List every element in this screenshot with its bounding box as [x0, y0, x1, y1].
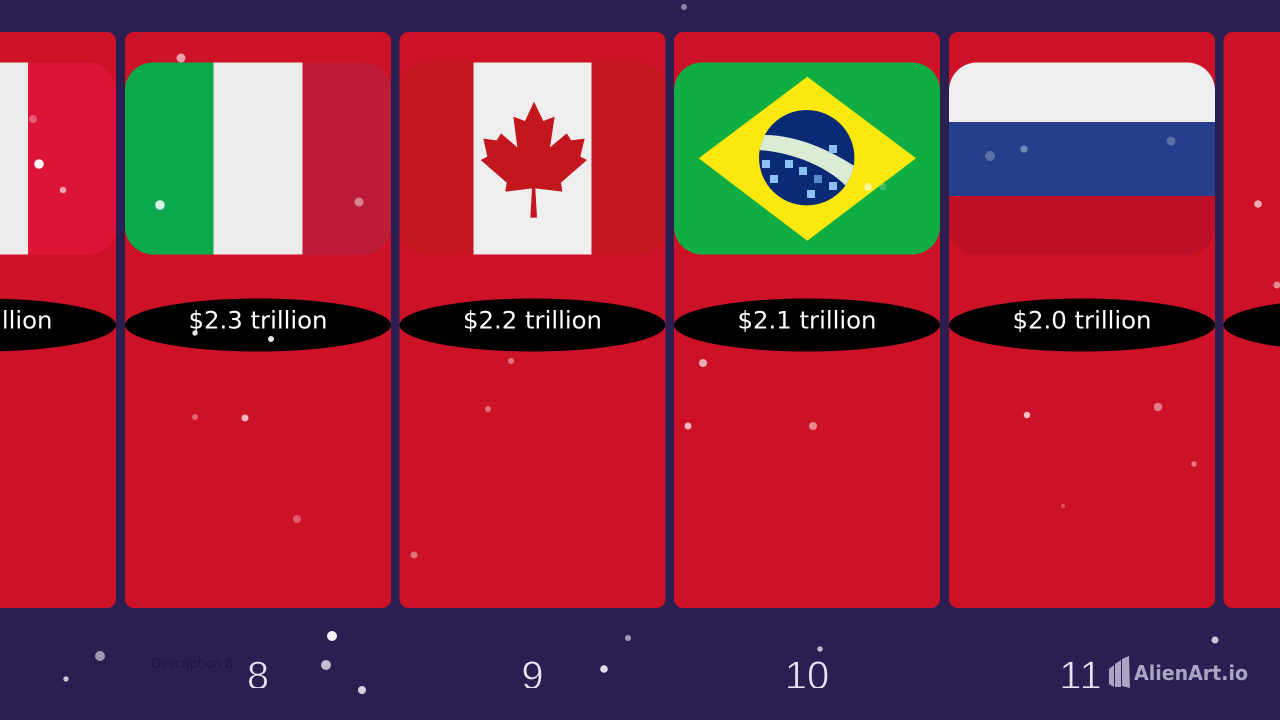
panel: Canada card	[400, 32, 666, 608]
flag: Brazil	[674, 62, 940, 255]
rank numbers	[249, 662, 1100, 688]
flag: Russia	[949, 62, 1215, 255]
caption: Description 8: Description 8	[151, 657, 233, 672]
rank numbers: 8	[247, 654, 269, 698]
icon: logo bars	[1109, 656, 1130, 688]
value pill: $2.1 trillion	[674, 298, 940, 352]
flag: white and red	[0, 62, 116, 255]
icon: maple leaf	[481, 102, 587, 218]
panel: Italy card	[125, 32, 392, 608]
panel: partial card right	[1224, 32, 1280, 608]
value pill: $2.0 trillion	[949, 298, 1215, 352]
panel: Brazil card	[674, 32, 940, 608]
panel: partial card left	[0, 32, 116, 608]
flag: Italy	[125, 62, 392, 255]
rank numbers: 10	[785, 654, 829, 698]
value pill: $2.1 trillion: $2.1 trillion	[738, 306, 876, 334]
value pill: partial	[0, 298, 116, 352]
rank numbers: 11	[1059, 654, 1103, 698]
value pill: $2.2 trillion	[400, 298, 666, 352]
value pill: $2.0 trillion: $2.0 trillion	[1012, 306, 1152, 334]
value pill: $2.2 trillion: $2.2 trillion	[463, 306, 602, 334]
logo: AlienArt.io: AlienArt.io	[1134, 661, 1248, 685]
rank numbers: 9	[521, 654, 544, 698]
flag: Canada	[400, 62, 666, 255]
panel: Russia card	[949, 32, 1215, 608]
value pill: $2.3 trillion	[125, 298, 391, 352]
logo: AlienArt.io	[1109, 656, 1248, 688]
value pill: $2.3 trillion: $2.3 trillion	[188, 306, 328, 334]
